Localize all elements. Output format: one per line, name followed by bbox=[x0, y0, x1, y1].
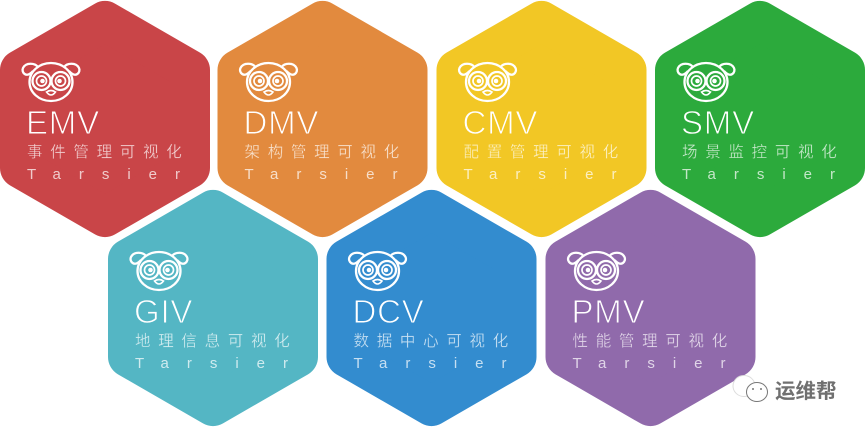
icon: tarsier bbox=[459, 63, 516, 101]
hexagon: SMV bbox=[675, 21, 853, 217]
text: Tarsier: Tarsier bbox=[135, 355, 306, 372]
text: 数据中心可视化: 数据中心可视化 bbox=[354, 332, 516, 350]
hexagon: EMV bbox=[20, 21, 198, 217]
text: Tarsier: Tarsier bbox=[464, 166, 635, 183]
label: EMV: EMV bbox=[26, 104, 100, 141]
icon: chat bubbles bbox=[733, 376, 768, 402]
text: 性能管理可视化: 性能管理可视化 bbox=[572, 332, 735, 350]
text: Tarsier: Tarsier bbox=[572, 355, 744, 372]
text: Tarsier: Tarsier bbox=[27, 166, 198, 183]
icon: tarsier bbox=[568, 252, 625, 290]
text: Tarsier: Tarsier bbox=[354, 355, 525, 372]
label: CMV: CMV bbox=[462, 104, 538, 141]
label: DMV: DMV bbox=[244, 104, 319, 141]
label: PMV: PMV bbox=[572, 293, 645, 330]
hexagon: CMV bbox=[456, 21, 635, 217]
hexagon: PMV bbox=[566, 210, 744, 406]
text: Tarsier: Tarsier bbox=[244, 166, 416, 183]
text: 运维帮: 运维帮 bbox=[775, 379, 836, 403]
label: DCV: DCV bbox=[352, 293, 425, 330]
label: SMV: SMV bbox=[681, 104, 755, 141]
icon: tarsier bbox=[240, 63, 297, 101]
hexagon: DMV bbox=[238, 21, 416, 217]
text: 配置管理可视化: 配置管理可视化 bbox=[464, 143, 626, 161]
label: GIV: GIV bbox=[134, 293, 193, 330]
watermark: 运维帮 bbox=[733, 376, 836, 403]
text: 事件管理可视化: 事件管理可视化 bbox=[27, 143, 189, 161]
text: 场景监控可视化: 场景监控可视化 bbox=[682, 143, 844, 161]
hexagon: GIV bbox=[128, 210, 306, 406]
icon: tarsier bbox=[131, 252, 187, 290]
icon: tarsier bbox=[349, 252, 406, 290]
hexagon: DCV bbox=[346, 210, 525, 406]
icon: tarsier bbox=[23, 63, 79, 101]
text: 地理信息可视化: 地理信息可视化 bbox=[135, 332, 297, 350]
text: 架构管理可视化: 架构管理可视化 bbox=[244, 143, 407, 161]
icon: tarsier bbox=[678, 63, 734, 101]
text: Tarsier: Tarsier bbox=[682, 166, 853, 183]
